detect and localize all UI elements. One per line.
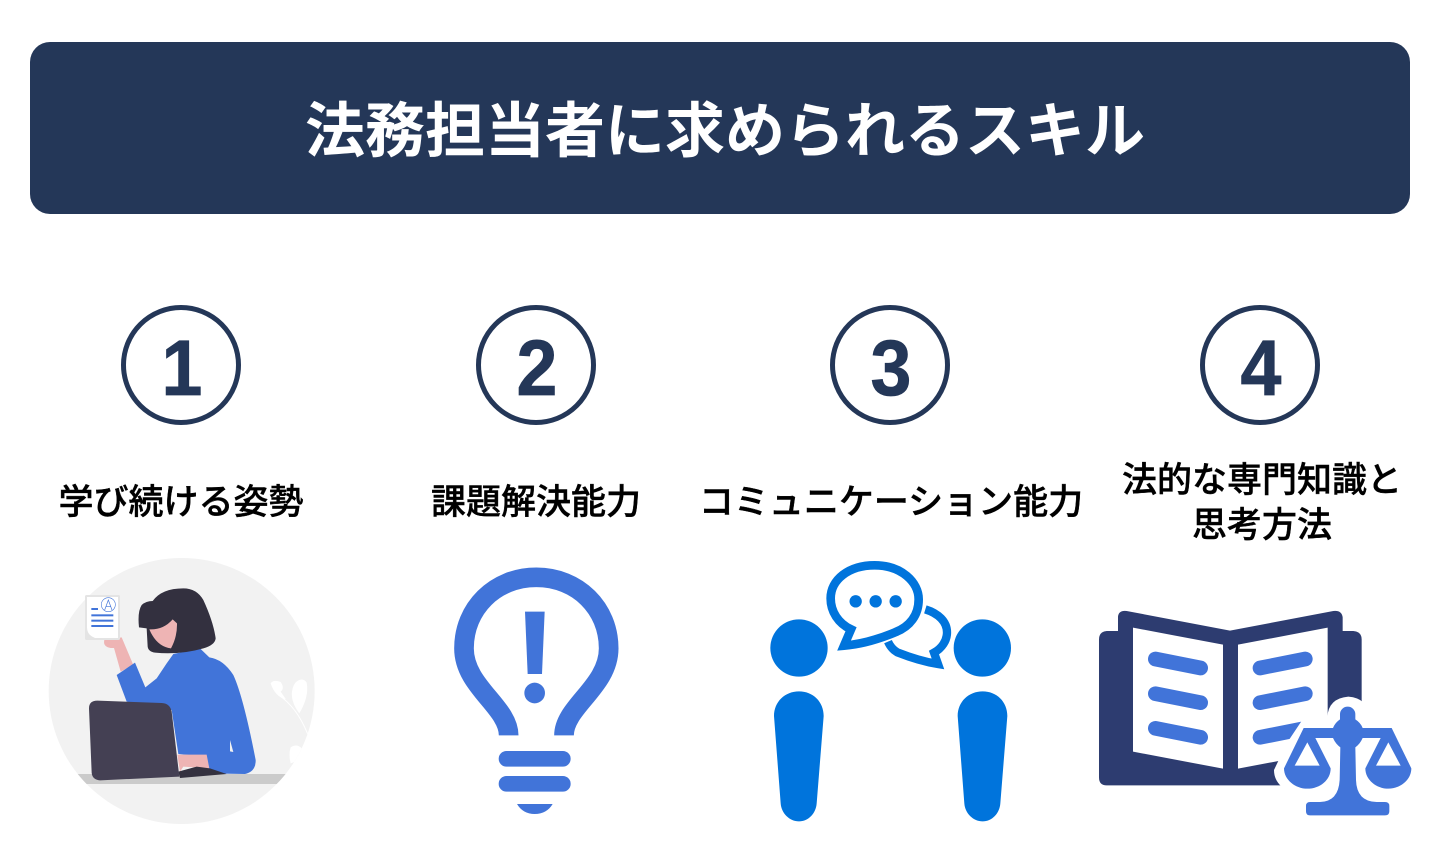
label: problem solving: 課題解決能力 xyxy=(431,474,641,525)
step number 3: 3 xyxy=(870,323,910,412)
label: legal knowledge and thinking xyxy=(1122,452,1402,548)
illustration: woman at laptop xyxy=(49,558,315,824)
title banner xyxy=(30,42,1410,214)
step number 4 xyxy=(1200,305,1320,425)
icon: light bulb with exclamation xyxy=(464,577,609,814)
title: 法務担当者に求められるスキル xyxy=(305,83,1145,170)
label: communication: コミュニケーション能力 xyxy=(699,474,1083,525)
step number 2 xyxy=(476,305,596,425)
step number 2: 2 xyxy=(516,323,556,412)
icon: two people talking xyxy=(770,565,1011,821)
step number 3 xyxy=(830,305,950,425)
step number 1: 1 xyxy=(161,323,201,412)
step number 1 xyxy=(121,305,241,425)
label: continuous learning: 学び続ける姿勢 xyxy=(58,474,304,525)
icon: open book with scales xyxy=(1099,611,1420,820)
label: legal knowledge and thinking: 思考方法 xyxy=(1192,497,1332,548)
label: legal knowledge and thinking: 法的な専門知識と xyxy=(1122,452,1402,503)
step number 4: 4 xyxy=(1240,323,1280,412)
